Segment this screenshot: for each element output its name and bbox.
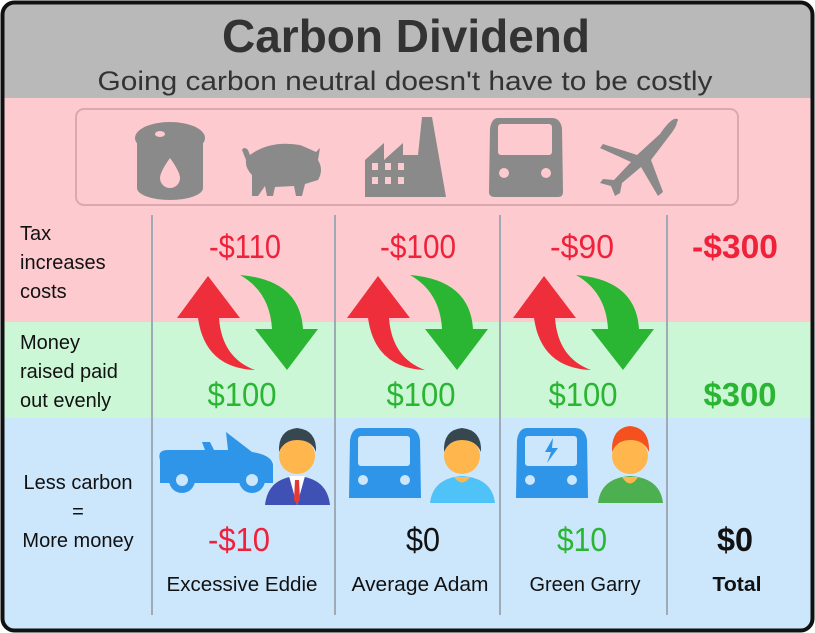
dividends: $300: [704, 376, 776, 413]
arrows: [177, 275, 654, 370]
label: money raised: raised paid: [20, 361, 118, 383]
dividends: [208, 376, 776, 413]
icon: convertible car: [159, 432, 273, 493]
results: $10: [557, 521, 607, 558]
icon: plane: [600, 119, 678, 196]
results: $0: [406, 521, 440, 558]
dividends: $100: [208, 376, 276, 413]
dividends: $100: [386, 376, 456, 413]
icon: bus: [489, 118, 563, 197]
tax costs: -$110: [209, 228, 281, 265]
icon strip: [76, 109, 738, 205]
tax costs: -$300: [692, 228, 778, 265]
label: less carbon: Less carbon: [24, 472, 132, 494]
icon: person eddie: [265, 428, 330, 505]
icon: oil barrel: [135, 122, 205, 200]
subtitle: Going carbon neutral doesn't have to be costly: [98, 66, 713, 96]
icon: pig: [242, 144, 321, 196]
column dividers: [152, 215, 667, 615]
label: tax increases costs: Tax: [20, 223, 51, 245]
icon: car adam: [349, 428, 421, 498]
results: -$10: [208, 521, 270, 558]
label: money raised: out evenly: [20, 390, 111, 412]
dividends: $100: [548, 376, 618, 413]
icon: electric car garry: [516, 428, 588, 498]
label: less carbon: More money: [22, 530, 134, 552]
label: tax increases costs: costs: [20, 281, 67, 303]
names: Excessive Eddie: [166, 574, 318, 596]
title: Carbon Dividend: [222, 10, 590, 62]
icon: person adam: [430, 428, 495, 503]
results: [208, 521, 753, 558]
names: Average Adam: [352, 574, 488, 596]
label: less carbon: =: [72, 501, 84, 523]
label: tax increases costs: increases: [20, 252, 106, 274]
names: Total: [712, 574, 762, 596]
names: [166, 574, 762, 596]
icon: person garry: [598, 426, 663, 503]
tax costs: [209, 228, 778, 265]
icon: factory: [365, 117, 446, 197]
tax costs: -$90: [550, 228, 614, 265]
results: $0: [717, 521, 753, 558]
label: money raised: Money: [20, 332, 80, 354]
tax costs: -$100: [380, 228, 456, 265]
names: Green Garry: [530, 574, 640, 596]
